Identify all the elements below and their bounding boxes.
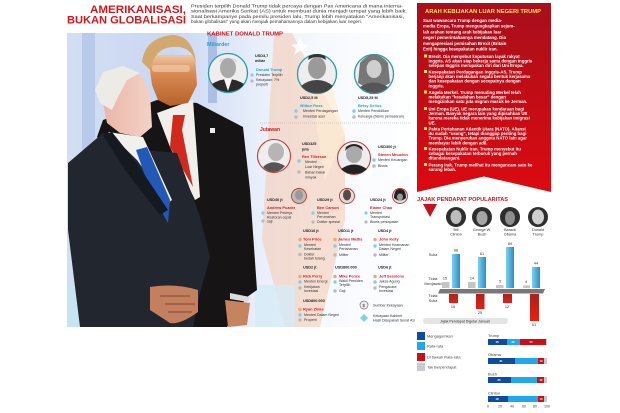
stacked bar chart: approval: 22 bbox=[511, 340, 515, 344]
text: John Kelly: Dalam Negeri bbox=[379, 247, 401, 251]
portraits: presidents bbox=[446, 207, 548, 227]
text: Jeff Sessions: Jaksa Agung bbox=[379, 280, 400, 284]
text: Donald Trump: properti bbox=[256, 82, 268, 86]
panel: Kabinet Donald Trump bbox=[207, 32, 415, 322]
text: Elaine Chao: Transportasi bbox=[370, 215, 390, 219]
text: James Mattis: James Mattis bbox=[338, 236, 362, 242]
bar chart: popularitas: Tidak bbox=[428, 277, 438, 281]
text: Ryan Zinke: Ryan Zinke bbox=[303, 306, 325, 312]
bullets: dan kesepakatan dengan secepatnya dengan bbox=[428, 79, 521, 84]
bullets: sebagai kesepakatan terburuk yang pernah bbox=[428, 151, 517, 156]
text: Mike Pence bbox=[333, 266, 363, 293]
text: Elaine Chao: Menteri bbox=[370, 211, 382, 215]
text: James Mattis: Militer bbox=[339, 253, 349, 257]
text: Ben Carson: Ben Carson bbox=[317, 205, 339, 210]
text: Ben Carson: Menteri bbox=[317, 211, 329, 215]
stacked bar chart: approval: 80 bbox=[533, 404, 537, 408]
text: Betsy DeVos: Keluarga (bisnis pemasaran) bbox=[358, 114, 404, 118]
bullets: itu sudah "usang", tetapi dianggap penting bagi bbox=[428, 131, 526, 136]
stacked bar chart: approval: 50 bbox=[529, 340, 533, 344]
intro text: Presiden terpilih Donald Trump tidak percaya dengan Pax Americana di mana interna- bbox=[191, 4, 404, 8]
bar chart: popularitas: 5 bbox=[499, 280, 501, 284]
stacked bar chart: approval: 40 bbox=[510, 404, 514, 408]
bullets: Inggris. bbox=[428, 83, 444, 88]
text: Tom Price: Kesehatan bbox=[304, 247, 321, 251]
text: Tom Price: Dokter bbox=[304, 252, 315, 256]
stacked bar chart: approval: 20 bbox=[498, 404, 502, 408]
bullets: Pakta Pertahanan Atlantik Utara (NATO). Aliansi bbox=[428, 126, 526, 132]
text: Ryan Zinke: Properti bbox=[304, 318, 317, 322]
text: Jeff Sessions: USD6 jt bbox=[378, 266, 392, 270]
stacked bar chart: approval: 12 bbox=[539, 378, 543, 382]
text: Wilbur Ross: Wilbur Ross bbox=[300, 103, 323, 108]
paragraph: Exit) hingga kesepakatan nuklir Iran. bbox=[423, 46, 498, 52]
heading: jutawan: Jutawan bbox=[260, 127, 280, 133]
stacked bar chart: approval: 60 bbox=[522, 404, 526, 408]
text: Mike Pence: Wakil Presiden bbox=[339, 279, 363, 283]
portrait: Donald Trump bbox=[208, 54, 248, 92]
portrait: Steven Mnuchin bbox=[338, 142, 370, 174]
text: Tom Price: Tom Price bbox=[303, 236, 322, 242]
bullets: Kesepakatan Nuklir Iran. Trump menyebut itu bbox=[428, 146, 521, 152]
bullets: ditandatangani. bbox=[428, 156, 460, 161]
title: BUKAN GLOBALISASI bbox=[67, 14, 186, 26]
bullets: selepas Inggris merupakan diri dari Uni Eropa. bbox=[428, 63, 524, 68]
bullets: mengizinkan satu juta migran masuk ke Jerman. bbox=[428, 99, 527, 104]
text: Rick Perry: Kebijakan bbox=[304, 285, 320, 289]
text: John Kelly bbox=[373, 229, 409, 257]
heading: miliarder: Miliarder bbox=[207, 42, 230, 48]
names: Bill bbox=[453, 228, 459, 232]
note pill: Jajak Pendapat Digelar Januari bbox=[440, 320, 490, 324]
portrait: Betsy DeVos bbox=[354, 54, 394, 94]
bar chart: popularitas: 16 bbox=[451, 305, 455, 309]
text: Rex Tillerson: Menteri bbox=[305, 160, 317, 164]
text: John Kelly: Militer bbox=[379, 253, 389, 257]
panel: jajak pendapat popularitas bbox=[417, 197, 548, 327]
text: Tom Price: USD16 jt bbox=[303, 229, 319, 233]
names: Trump bbox=[533, 232, 543, 236]
legend: approval bbox=[417, 332, 461, 371]
intro text bbox=[191, 4, 407, 24]
text: Donald Trump: miliar bbox=[255, 59, 266, 63]
stacked bar chart: approval: Bush bbox=[488, 372, 497, 376]
paragraph: media Eropa, Trump mengungkapkan sejum- bbox=[423, 24, 515, 29]
text: Donald Trump: Donald Trump bbox=[256, 67, 283, 72]
text: Donald Trump: Presiden Terpilih bbox=[256, 73, 283, 77]
text: Mike Pence: Terpilih bbox=[339, 283, 350, 287]
icon: down triangle bbox=[423, 204, 437, 217]
text: Mike Pence: USD800.000 bbox=[335, 266, 357, 270]
stacked bar chart: approval: Trump bbox=[488, 333, 499, 338]
stacked bar chart: approval: 100 bbox=[544, 404, 550, 408]
bullets: membayar lebih dengan adil. bbox=[428, 140, 487, 145]
portrait: Andrew Puzder bbox=[292, 188, 306, 204]
intro text: sionalisasi Amerika Serikat (AS) untuk membuat dunia menjadi tempat yang lebih baik. bbox=[191, 9, 407, 14]
bar chart: popularitas: 15 bbox=[443, 276, 447, 280]
text: Betsy DeVos: Menteri Pendidikan bbox=[358, 109, 389, 113]
legend: kekayaan kabinet bbox=[360, 314, 415, 322]
bullets: Brexit. Dia menyebut keputusan layak rakyat bbox=[428, 54, 520, 59]
text: Rick Perry: USD2 jt bbox=[303, 266, 317, 270]
text: Andrew Puzder bbox=[261, 198, 296, 224]
legend: kekayaan kabinet: Hasil Disepakati Senat AS bbox=[373, 318, 415, 322]
legend: kekayaan kabinet: Kekayaan Kabinet bbox=[373, 314, 402, 318]
text: John Kelly: USD4 jt bbox=[378, 229, 392, 233]
stacked bar chart: approval: Obama bbox=[488, 352, 502, 357]
portrait: Ben Carson bbox=[340, 188, 354, 204]
bar chart: popularitas: 89 bbox=[508, 242, 512, 246]
text: Mike Pence: Mike Pence bbox=[339, 274, 361, 278]
photo: Mike Pence and Donald Trump bbox=[67, 33, 420, 327]
legend: sumber kekayaan: $ bbox=[362, 303, 366, 308]
text: Wilbur Ross: Menteri Perdagangan bbox=[303, 109, 338, 113]
bar chart: popularitas: 51 bbox=[532, 323, 536, 327]
bar chart: popularitas: 12 bbox=[505, 305, 509, 309]
text: Andrew Puzder: USD40 jt bbox=[267, 198, 283, 202]
text: Tom Price: Menteri bbox=[304, 243, 316, 247]
bar chart: popularitas: 44 bbox=[534, 262, 538, 266]
bullets: Angela Merkel. Trump menuding Merkel telah bbox=[428, 90, 521, 95]
text: Betsy DeVos: Betsy DeVos bbox=[358, 103, 382, 108]
bullets: karena mereka tidak menerima kebijakan imigrasi bbox=[428, 116, 530, 121]
stacked bar chart: approval: 10 bbox=[539, 397, 543, 401]
text: Ben Carson: Perumahan bbox=[317, 215, 336, 219]
text: John Kelly: John Kelly bbox=[379, 236, 400, 242]
text: Andrew Puzder: saji bbox=[267, 220, 273, 224]
text: Ryan Zinke: Menteri Dalam Negeri bbox=[304, 313, 339, 317]
bar chart: popularitas bbox=[424, 242, 545, 327]
stacked bar chart: approval: 10 bbox=[539, 359, 543, 363]
bar chart: popularitas: 4 bbox=[525, 280, 527, 284]
legend: approval: Di bawah Rata-rata bbox=[427, 354, 461, 360]
text: Rex Tillerson: Rex Tillerson bbox=[302, 154, 327, 159]
names: Clinton bbox=[450, 232, 462, 236]
portrait: Wilbur Ross bbox=[298, 54, 336, 94]
bullets: Uni Eropa (UE). UE merupakan kendaraan bagi bbox=[428, 106, 524, 112]
paragraph: mengapresiasi pemisahan Brexit (Britain bbox=[423, 41, 507, 46]
paragraph: lah arahan tentang arah kebijakan luar bbox=[423, 29, 502, 34]
panel: arah kebijakan luar negeri Trump bbox=[417, 3, 551, 192]
legend: approval: Tak Berpendapat bbox=[427, 364, 457, 370]
title: AMERIKANISASI, bbox=[90, 4, 186, 16]
stacked bar chart: approval: 25 bbox=[497, 378, 501, 382]
stacked bar chart: approval: 31 bbox=[499, 359, 503, 363]
bar chart: popularitas: Suka bbox=[429, 253, 438, 257]
text: Ryan Zinke bbox=[298, 299, 339, 322]
bullets: Jerman. Banyak negara lain yang dipisahkan UE bbox=[428, 111, 528, 116]
stacked bar chart: approval: Clinton bbox=[488, 390, 500, 396]
text: Steven Mnuchin: Menteri Keuangan bbox=[378, 158, 407, 162]
paragraph: negeri pemerintahannya mendatang. Dia bbox=[423, 35, 506, 40]
text: Rick Perry bbox=[298, 266, 328, 293]
bar chart: popularitas: 14 bbox=[470, 276, 474, 280]
bar chart: popularitas: 61 bbox=[480, 252, 484, 256]
text: Donald Trump bbox=[250, 54, 283, 86]
text: Steven Mnuchin bbox=[372, 145, 408, 168]
bullets: Inggris. AS akan siap bekerja sama dengan Inggris bbox=[428, 59, 533, 64]
text: Rex Tillerson: Luar Negeri bbox=[305, 165, 324, 169]
text: Betsy DeVos bbox=[352, 96, 404, 119]
text: Rick Perry: Rick Perry bbox=[303, 274, 323, 278]
names: Obama bbox=[504, 232, 517, 236]
text: Donald Trump: USD3,7 bbox=[255, 54, 268, 58]
text: Elaine Chao bbox=[364, 198, 398, 224]
text: Donald Trump: Kekayaan: 7% bbox=[256, 78, 280, 82]
text: Tom Price bbox=[298, 229, 325, 260]
text: Mike Pence: Gaji bbox=[339, 289, 346, 293]
text: Rick Perry: Investasi bbox=[304, 289, 318, 293]
bar chart: popularitas: Suka bbox=[429, 299, 438, 303]
names: Bush bbox=[478, 232, 486, 236]
legend: sumber kekayaan: Sumber Kekayaan bbox=[373, 304, 403, 308]
names: George W. bbox=[473, 228, 491, 232]
title bbox=[67, 4, 186, 26]
portrait: Rex Tillerson bbox=[258, 140, 290, 172]
text: Jeff Sessions: Pengacara bbox=[379, 285, 396, 289]
text: Betsy DeVos: USD5,25 M bbox=[358, 96, 378, 100]
bullets: melakukan "kesalahan besar" dengan bbox=[428, 95, 506, 100]
heading: jajak pendapat: JAJAK PENDAPAT POPULARITAS bbox=[417, 197, 508, 203]
heading: arah kebijakan: ARAH KEBIJAKAN LUAR NEGERI TRUMP bbox=[425, 9, 541, 15]
text: Rick Perry: Menteri Energi bbox=[304, 280, 328, 284]
text: Andrew Puzder: Restoran cepat bbox=[267, 216, 291, 220]
bullets bbox=[424, 54, 533, 172]
legend: sumber kekayaan bbox=[360, 301, 403, 309]
text: Elaine Chao: Bisnis perkapalan bbox=[370, 220, 398, 224]
names: Donald bbox=[532, 228, 544, 232]
bullets: Kesepakatan Perdagangan Inggris-AS. Trump bbox=[428, 70, 522, 74]
stacked bar chart: approval bbox=[487, 333, 550, 408]
names bbox=[450, 228, 544, 236]
names: Barack bbox=[504, 228, 516, 232]
text: Steven Mnuchin: Bisnis bbox=[378, 164, 388, 168]
text: Wilbur Ross: USD2,5 M bbox=[300, 96, 318, 100]
bar chart: popularitas: Tidak bbox=[428, 294, 438, 298]
text: James Mattis bbox=[333, 229, 362, 257]
stacked bar chart: approval: 0 bbox=[487, 404, 489, 408]
text: Elaine Chao: Elaine Chao bbox=[370, 205, 393, 210]
text: Jeff Sessions bbox=[373, 266, 404, 293]
text: Andrew Puzder: Andrew Puzder bbox=[267, 205, 296, 210]
text: Ben Carson: USD29 jt bbox=[317, 198, 333, 202]
text: Wilbur Ross: Investasi aset bbox=[303, 114, 325, 118]
text: Rex Tillerson: Bahan bakar bbox=[305, 170, 326, 174]
paragraph bbox=[423, 18, 515, 52]
text: Rex Tillerson: juta bbox=[301, 148, 310, 152]
text: Ben Carson bbox=[311, 198, 340, 224]
text: Ryan Zinke: USD800.000 bbox=[303, 299, 325, 303]
paragraph: Saat wawancara Trump dengan media- bbox=[423, 18, 503, 23]
text: Rex Tillerson: minyak bbox=[305, 176, 317, 180]
text: Rex Tillerson: USD325 bbox=[302, 142, 316, 146]
text: Ben Carson: Dokter spesial bbox=[317, 220, 340, 224]
text: Elaine Chao: USD24 jt bbox=[370, 198, 386, 202]
text: Tom Price: bedah tulang bbox=[304, 256, 325, 260]
text: John Kelly: Menteri Keamanan bbox=[379, 243, 409, 247]
portrait: Elaine Chao bbox=[392, 188, 408, 204]
bar chart: popularitas: 68 bbox=[454, 248, 458, 252]
stacked bar chart: approval: 18 bbox=[495, 397, 499, 401]
text: Andrew Puzder: Menteri Pekerja bbox=[267, 211, 292, 215]
bullets: Trump. Dia menyerukan anggota NATO lain agar bbox=[428, 136, 527, 141]
text: James Mattis: Pertahanan bbox=[339, 247, 358, 251]
text: Jeff Sessions: Jeff Sessions bbox=[379, 274, 404, 278]
stacked bar chart: approval: 18 bbox=[495, 340, 499, 344]
text: Jeff Sessions: Investasi bbox=[379, 289, 393, 293]
bullets: sarang lebah. bbox=[428, 167, 456, 172]
text: Rex Tillerson bbox=[297, 142, 327, 180]
text: Wilbur Ross bbox=[294, 96, 338, 119]
legend: approval: Mengagumkan bbox=[427, 334, 453, 338]
bullets: Perang Irak. Trump melihat itu mengancam satu ke bbox=[428, 162, 533, 168]
text: Steven Mnuchin: Steven Mnuchin bbox=[378, 152, 408, 157]
legend: approval: Rata-rata bbox=[427, 344, 444, 348]
heading: kabinet: KABINET DONALD TRUMP bbox=[207, 32, 283, 38]
bar chart: popularitas: 25 bbox=[478, 311, 482, 315]
text: James Mattis: Menteri bbox=[339, 243, 351, 247]
intro text: Saat berkampanye pada pemilu presiden lalu, Trump lebih menyatakan "Amerikanisasi, bbox=[191, 14, 404, 19]
bullets: berjanji akan melakukan segala bentuk kerjasama bbox=[428, 74, 531, 79]
bullets: UE. bbox=[428, 120, 436, 125]
text: Steven Mnuchin: USD300 jt bbox=[378, 145, 396, 149]
intro text: bukan globalisasi" yang akan menjadi pemahamannya dalam kebijakan luar negeri. bbox=[191, 19, 362, 24]
bar chart: popularitas: Menjawab bbox=[424, 282, 442, 286]
text: James Mattis: USD11 jt bbox=[338, 229, 354, 233]
